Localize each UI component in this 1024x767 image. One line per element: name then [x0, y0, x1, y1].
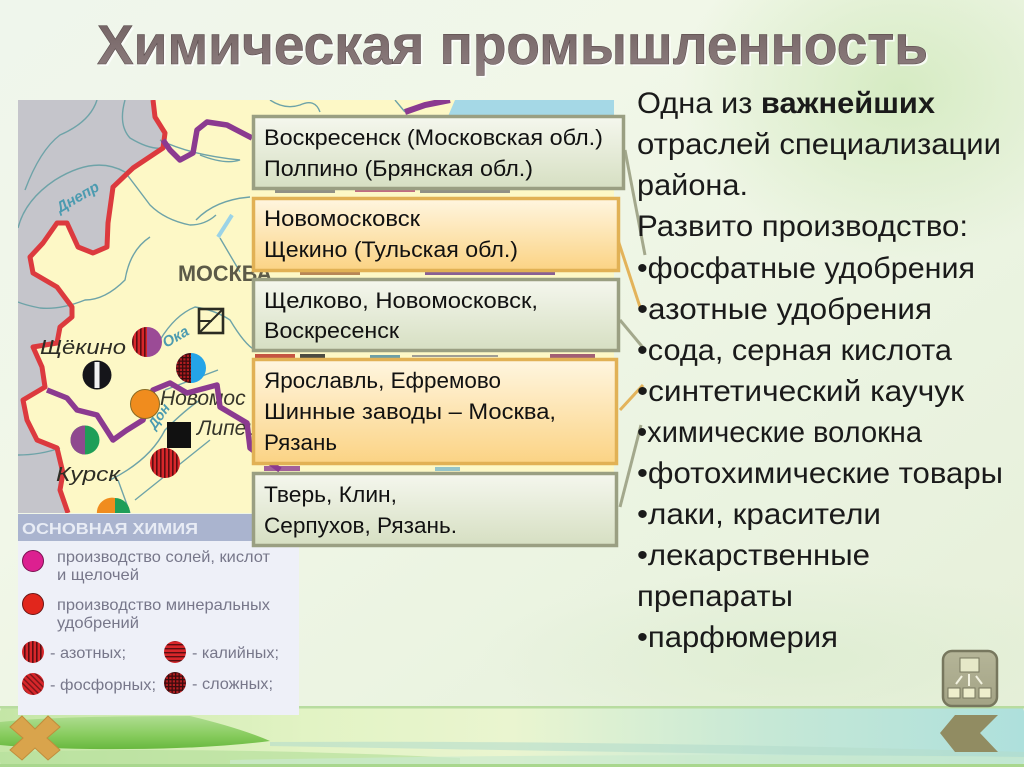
map: square symbol — [199, 309, 223, 333]
box: Tver, Klin: Тверь, Клин, — [264, 482, 397, 507]
box: Novomoskovsk, Shchekino: Новомосковск — [264, 206, 420, 231]
right text block: Одна из важнейших — [637, 87, 935, 120]
box: Voskresensk, Polpino — [254, 116, 624, 188]
bottom decorative band — [0, 706, 1024, 767]
legend: salts and acids: и щелочей — [57, 567, 139, 584]
right text block: района. — [637, 169, 748, 202]
map: Dnieper river double line — [218, 215, 232, 237]
legend: phosphorus — [22, 673, 156, 695]
legend: nitrogen — [22, 641, 126, 663]
map: blue water area at top right — [448, 100, 614, 115]
map: nitrogen fertilizer circle — [150, 448, 180, 478]
box: Tver, Klin: Серпухов, Рязань. — [264, 513, 457, 538]
legend: mineral fertilizers — [22, 594, 270, 632]
right text block: •лекарственные — [637, 539, 870, 572]
connector lines — [617, 150, 645, 507]
legend: salts and acids — [22, 549, 271, 584]
box: Yaroslavl, Efremovo: Рязань — [264, 430, 337, 455]
map: label Don: Дон — [144, 400, 173, 433]
box: Shchelkovo — [254, 280, 618, 350]
map: label Kursk: Курск — [56, 464, 122, 486]
title: Химическая промышленность — [97, 13, 928, 76]
box: Novomoskovsk, Shchekino — [254, 198, 618, 270]
right text block: •сода, серная кислота — [637, 334, 952, 367]
box: Shchelkovo: Воскресенск — [264, 318, 399, 343]
box: Yaroslavl, Efremovo: Ярославль, Ефремово — [264, 368, 501, 393]
box: Yaroslavl, Efremovo — [254, 360, 616, 464]
map: symbols in gaps between boxes — [255, 190, 595, 471]
map: label Oka: Ока — [160, 323, 192, 351]
right text block: •химические волокна — [637, 416, 922, 449]
right text block: •парфюмерия — [637, 621, 838, 654]
legend: phosphorus: - фосфорных; — [50, 677, 156, 694]
title: Химическая промышленность — [99, 15, 930, 78]
map: chemical fibres circle — [82, 360, 112, 390]
legend: complex — [164, 672, 273, 694]
legend header: ОСНОВНАЯ ХИМИЯ — [22, 521, 198, 538]
map: purple pipeline north — [163, 122, 252, 160]
legend panel — [18, 514, 299, 715]
right text block — [637, 87, 1003, 654]
legend header — [18, 514, 299, 541]
map: black square — [167, 422, 191, 448]
icon: hierarchy home button — [943, 651, 997, 706]
right text block: отраслей специализации — [637, 128, 1001, 161]
right text block: •лаки, красители — [637, 498, 881, 531]
map: label Lipetsk: Липецк — [195, 417, 269, 440]
box: Tver, Klin — [254, 474, 616, 546]
legend: nitrogen: - азотных; — [50, 645, 126, 662]
right text block: •синтетический каучук — [637, 375, 965, 408]
map: purple pipeline south — [47, 383, 280, 470]
box: Voskresensk, Polpino: Полпино (Брянская обл.) — [264, 156, 533, 181]
icon: back arrow — [940, 715, 998, 752]
map: label Dnieper: Днепр — [52, 178, 102, 217]
right text block: •фосфатные удобрения — [637, 252, 975, 285]
map: label Novomoskovsk: Новомос — [160, 387, 246, 410]
map — [18, 100, 614, 528]
legend: salts and acids: производство солей, кислот — [57, 549, 271, 566]
legend: potassium: - калийных; — [192, 645, 279, 662]
map: rivers — [18, 100, 405, 513]
map: red regional border — [23, 100, 165, 513]
map: Shchyokino production circle — [132, 327, 162, 357]
map: orange circle — [130, 390, 160, 418]
icon: close cross — [10, 716, 60, 760]
map: label Moscow: МОСКВА — [178, 261, 272, 286]
right text block: Развито производство: — [637, 210, 968, 243]
legend: complex: - сложных; — [192, 676, 273, 693]
box: Novomoskovsk, Shchekino: Щекино (Тульская обл.) — [264, 237, 518, 262]
map: label Shchyokino: Щёкино — [40, 337, 126, 359]
legend: mineral fertilizers: удобрений — [57, 615, 139, 632]
box: Voskresensk, Polpino: Воскресенск (Московская обл.) — [264, 125, 603, 150]
box: Yaroslavl, Efremovo: Шинные заводы – Москва, — [264, 399, 556, 424]
right text block: препараты — [637, 580, 793, 613]
legend: mineral fertilizers: производство минеральных — [57, 597, 270, 614]
box: Shchelkovo: Щелково, Новомосковск, — [264, 288, 538, 313]
right text block: •азотные удобрения — [637, 293, 932, 326]
map: mixed circle — [176, 353, 206, 383]
map: purple pipeline top right — [405, 100, 450, 112]
right text block: •фотохимические товары — [637, 457, 1003, 490]
map: purple green circle — [70, 426, 100, 454]
map: orange green circle — [96, 498, 130, 513]
legend: potassium — [164, 641, 279, 663]
map: neighbouring territory in grey — [18, 100, 165, 513]
